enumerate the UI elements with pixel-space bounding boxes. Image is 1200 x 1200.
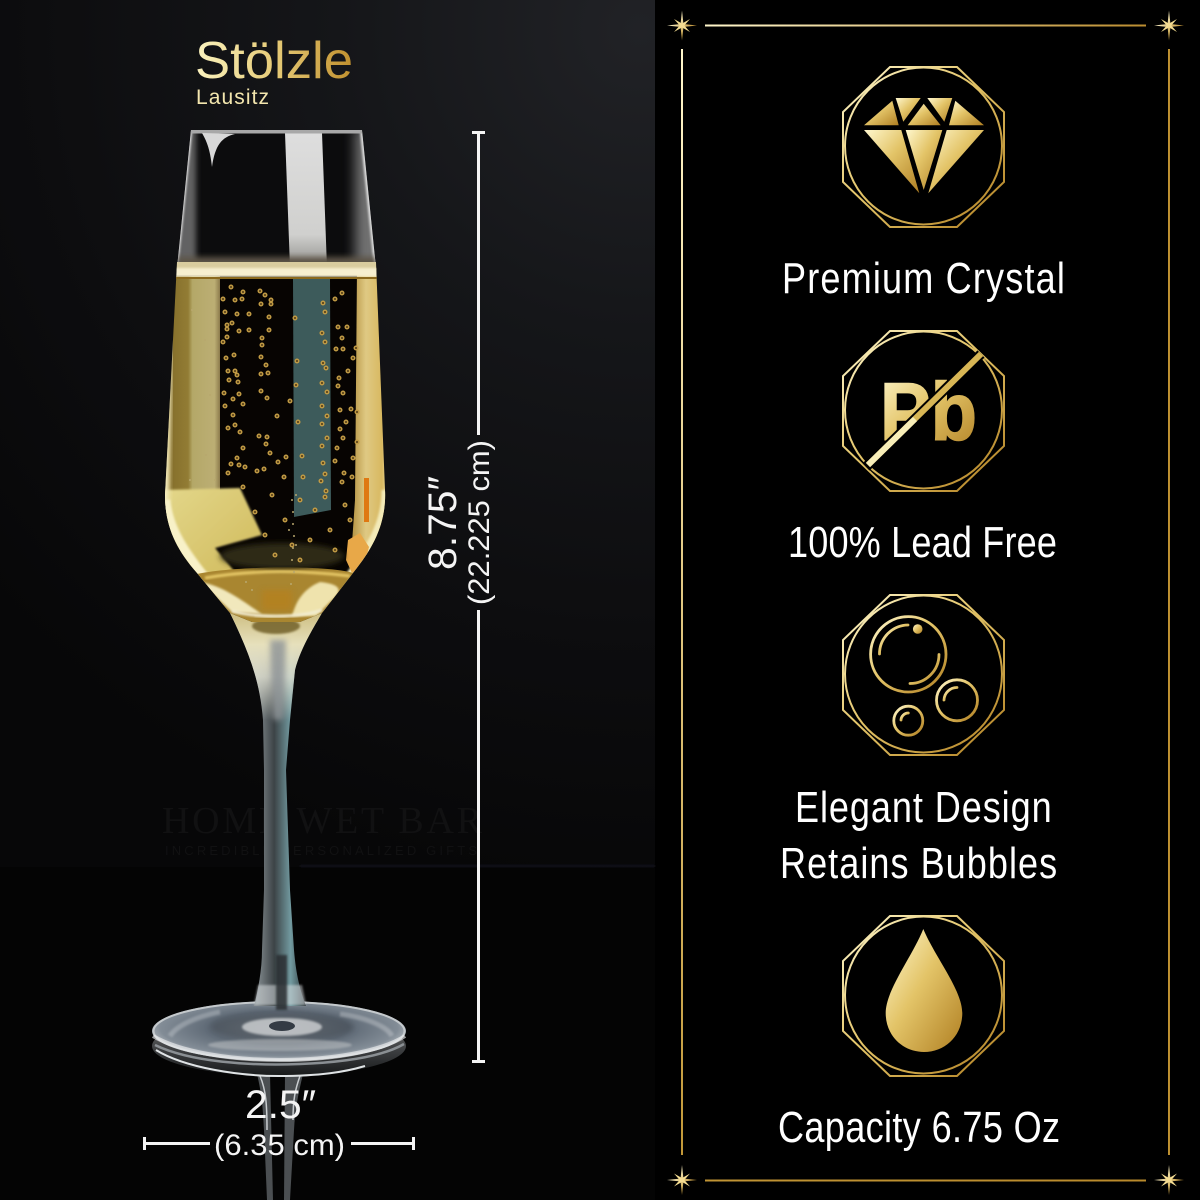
glass foot — [152, 1001, 406, 1076]
champagne — [155, 262, 390, 624]
icon: bubbles — [843, 595, 1004, 755]
label: 100% Lead Free — [788, 518, 1057, 567]
glass stem — [230, 613, 322, 1010]
icon: no lead — [843, 331, 1004, 491]
label: Capacity 6.75 Oz — [778, 1103, 1060, 1152]
feature: capacity — [778, 916, 1060, 1152]
height label: (22.225 cm) — [463, 440, 496, 605]
champagne flute — [152, 125, 406, 1200]
height label: 8.75″ — [421, 476, 465, 570]
bubbles — [190, 287, 357, 590]
logo: Stölzle Lausitz: Stölzle — [195, 32, 353, 90]
logo: Stölzle Lausitz: Lausitz — [196, 86, 269, 109]
label — [780, 783, 1057, 888]
feature: premium crystal — [782, 67, 1065, 303]
watermark: Home Wet Bar: INCREDIBLE PERSONALIZED GIFTS — [165, 843, 477, 858]
left photo background — [0, 0, 655, 1200]
label: Elegant Design — [795, 783, 1052, 832]
label: Retains Bubbles — [780, 839, 1057, 888]
icon: no lead: Pb — [880, 367, 977, 458]
base width label — [214, 1083, 345, 1162]
icon: drop — [843, 916, 1004, 1076]
empty upper bowl — [178, 130, 376, 262]
stem reflection on table — [257, 1074, 303, 1200]
watermark: Home Wet Bar: HOME WET BAR — [162, 800, 483, 842]
base width label: 2.5″ — [245, 1083, 316, 1127]
decorative gold frame — [667, 10, 1184, 1195]
feature: lead free — [788, 331, 1057, 567]
icon: diamond — [843, 67, 1004, 227]
height dimension line — [421, 131, 496, 1063]
label: Premium Crystal — [782, 254, 1065, 303]
base width dimension line — [143, 1083, 415, 1162]
right panel background — [655, 0, 1200, 1200]
height label — [421, 440, 496, 605]
feature: elegant design — [780, 595, 1057, 888]
base width label: (6.35 cm) — [214, 1129, 345, 1162]
